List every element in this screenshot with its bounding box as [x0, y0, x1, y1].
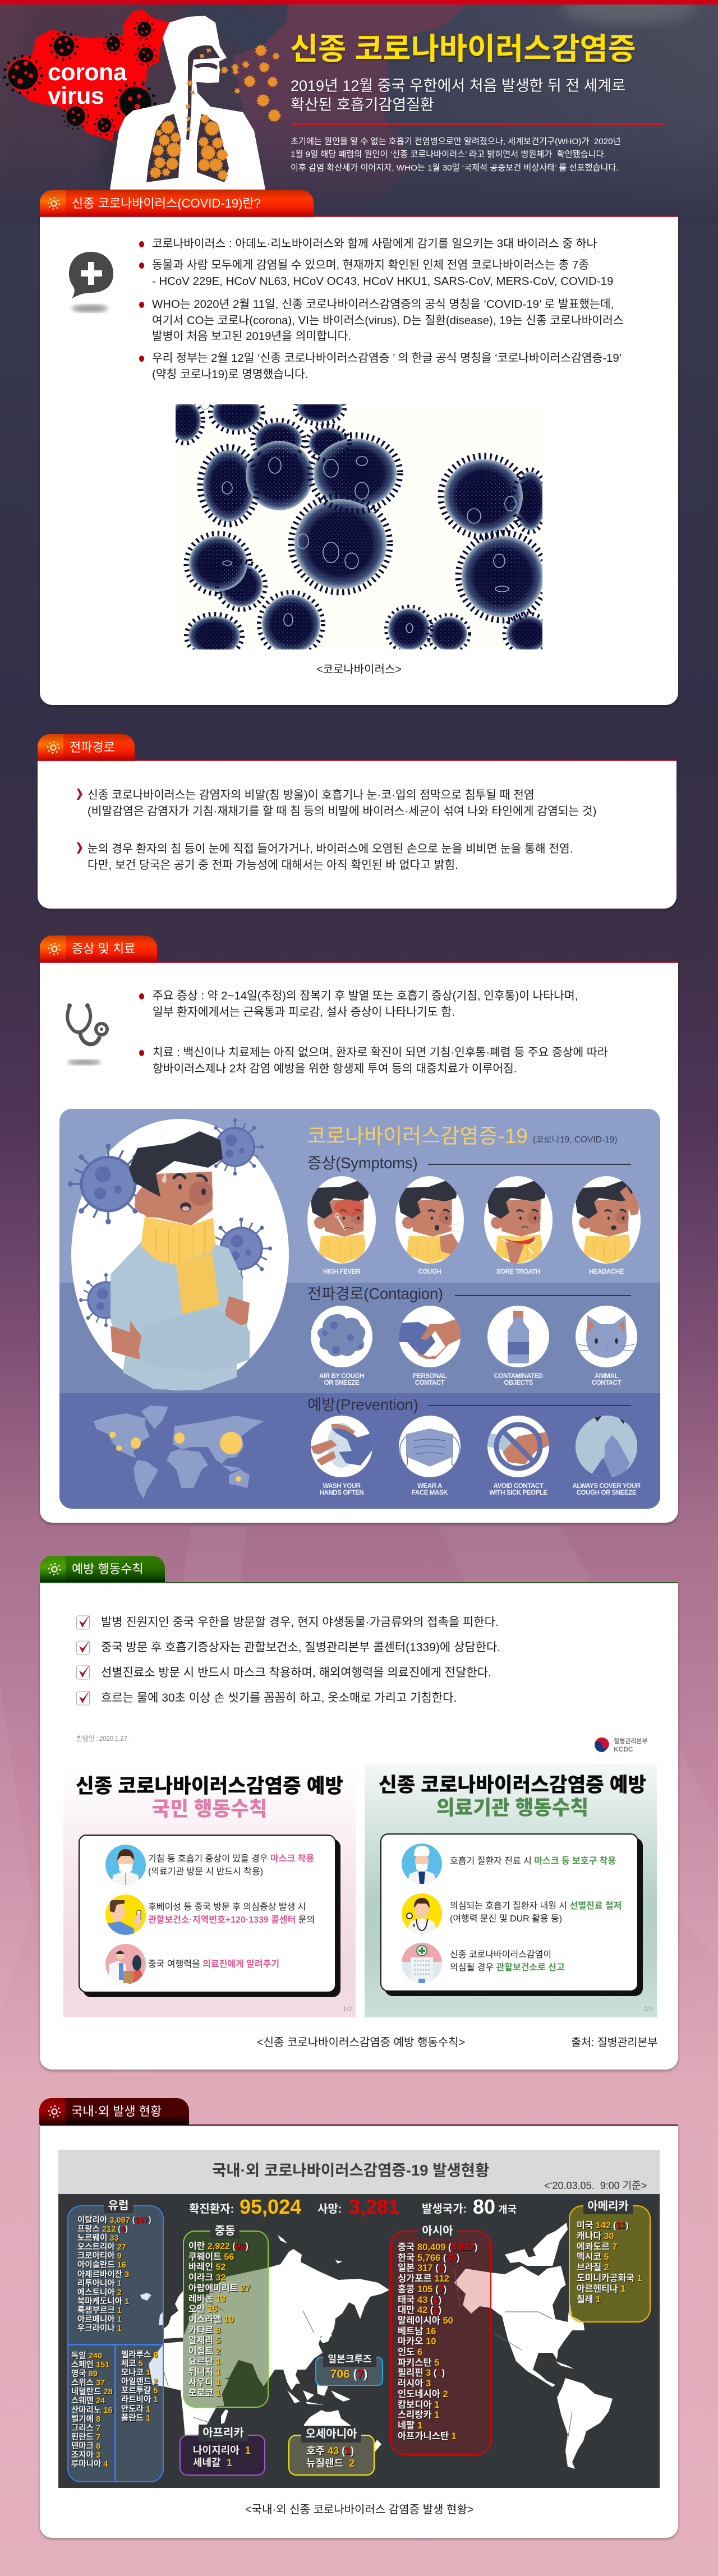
tab heading: 신종 코로나바이러스(COVID-19)란?: 신종 코로나바이러스(COVID-19)란? [72, 196, 261, 210]
poster subtitle: 국민 행동수칙 [152, 1793, 267, 1822]
subtitle: 2019년 12월 중국 우한에서 처음 발생한 뒤 전 세계로 [291, 77, 625, 94]
checklist: 흐르는 물에 30초 이상 손 씻기를 꼼꼼히 하고, 옷소매로 가리고 기침한다. [101, 1692, 457, 1704]
labels: contagion: CONTACT [415, 1380, 444, 1386]
text: row 1 [148, 1852, 314, 1878]
labels: prevention: FACE MASK [412, 1490, 448, 1496]
world map [58, 2194, 660, 2488]
bullet list: coronavirus facts: 발병이 처음 보고된 2019년을 의미합니다. [152, 330, 351, 343]
region label [323, 2352, 376, 2367]
text block: transmission notes: 다만, 보건 당국은 공기 중 전파 가능성에 대해서는 아직 확인된 바 없다고 밝힘. [88, 859, 458, 872]
country list: 카타르 8 [188, 2326, 221, 2335]
heading: contagion: 전파경로(Contagion) [307, 1285, 443, 1302]
country list: upper: 북마케도니아 1 [77, 2297, 129, 2306]
tab heading: 증상 및 치료: 증상 및 치료 [72, 942, 135, 956]
country list: 멕시코 5 [577, 2252, 609, 2262]
region label: 유럽 [108, 2200, 128, 2212]
country list: 요르단 1 [188, 2357, 221, 2367]
labels: contagion: CONTAMINATED [494, 1373, 542, 1380]
country list: 이란 2,922 (92) [188, 2242, 248, 2251]
issue date: 발행일 : 2020.1.27. [76, 1735, 128, 1743]
checklist: 중국 방문 후 호흡기증상자는 관할보건소, 질병관리본부 콜센터(1339)에 상담한다. [101, 1641, 500, 1654]
country list: 사우디 1 [188, 2378, 221, 2388]
country list: 인도네시아 2 [398, 2389, 448, 2399]
intro text [291, 137, 621, 173]
text: row 2 [148, 1901, 315, 1927]
country list: 알제리 5 [188, 2336, 221, 2345]
tab heading: 전파경로 [38, 734, 135, 761]
icon: speech bubble with plus [69, 252, 113, 313]
country list: 뉴질랜드 2 [306, 2458, 355, 2469]
world map with outbreak dots [94, 1405, 264, 1499]
icon: high fever [307, 1176, 376, 1264]
region label: 일본크루즈 [328, 2354, 372, 2365]
region label: 아메리카 [587, 2200, 629, 2213]
icon: stethoscope [66, 1003, 109, 1066]
country list: 중국 80,409 (3,012) [398, 2242, 477, 2252]
country list: 에콰도르 7 [577, 2242, 617, 2252]
heading: symptoms: 증상(Symptoms) [307, 1154, 417, 1172]
lungs silhouette figure with orange virus particles [110, 16, 280, 190]
country list: 파키스탄 5 [398, 2358, 440, 2368]
panel: COVID-19 infographic illustration [59, 1109, 660, 1509]
country list [398, 2242, 477, 2441]
text: row 2 [450, 1900, 622, 1925]
country list: 바레인 52 [188, 2262, 225, 2272]
intro text: 1월 9일 해당 폐렴의 원인이 ‘신종 코로나바이러스’ 라고 밝히면서 병원체가 확인됐습니다. [291, 150, 606, 159]
tab heading: 신종 코로나바이러스(COVID-19)란? [40, 190, 314, 216]
tab heading: 예방 행동수칙 [40, 1556, 165, 1582]
bullet list: coronavirus facts: - HCoV 229E, HCoV NL63, HCoV OC43, HCoV HKU1, SARS-CoV, MERS-CoV, COVID-19 [152, 275, 613, 287]
country list: upper: 아제르바이잔 3 [77, 2270, 129, 2279]
bullet list: coronavirus facts [139, 238, 624, 380]
country list: upper: 이탈리아 3,087 (107) [77, 2216, 151, 2225]
poster title: 신종 코로나바이러스감염증 예방 [76, 1770, 343, 1799]
box: Oceania [288, 2435, 375, 2476]
labels: contagion: CONTACT [592, 1380, 621, 1386]
wordmark: corona virus: corona [48, 59, 126, 86]
title: 신종 코로나바이러스감염증 [290, 32, 636, 66]
labels: prevention [320, 1483, 641, 1496]
panel: symptoms and treatment [40, 962, 678, 1523]
text: row 2: 관할보건소·지역번호+120·1339 콜센터 문의 [148, 1915, 315, 1925]
country list: 세네갈 1 [193, 2457, 232, 2468]
country list: 캐나다 30 [577, 2232, 614, 2241]
country list: 러시아 3 [398, 2379, 431, 2389]
text block: symptoms and treatment: 일부 환자에게서는 근육통과 피로감, 설사 증상이 나타나기도 함. [153, 1006, 455, 1019]
band: prevention background [59, 1393, 660, 1509]
country list: lower right [121, 2351, 158, 2423]
box: Europe [67, 2205, 164, 2482]
country list: lower right: 모나코 1 [121, 2368, 150, 2377]
country list: 튀니지 1 [188, 2367, 221, 2377]
country list: 인도 6 [398, 2347, 422, 2357]
country list: lower right: 체코 5 [121, 2360, 143, 2368]
text: row 3 [450, 1948, 565, 1974]
country list: upper: 프랑스 212 (4) [77, 2225, 128, 2234]
text: row 2: 후베이성 등 중국 방문 후 의심증상 발생 시 [148, 1902, 306, 1912]
country list: 캄보디아 1 [398, 2400, 440, 2410]
subheading: 코로나19, COVID-19: (코로나19, COVID-19) [533, 1135, 617, 1145]
country list: upper: 아이슬란드 16 [77, 2261, 126, 2270]
text block: symptoms and treatment [139, 989, 607, 1075]
country list: lower left: 핀란드 7 [71, 2433, 100, 2442]
country list: 아프가니스탄 1 [398, 2431, 457, 2441]
labels: prevention: AVOID CONTACT [494, 1483, 543, 1490]
icon: headache [572, 1176, 641, 1264]
icon: sore throat [484, 1176, 553, 1264]
box: Africa [180, 2435, 265, 2476]
country list: 일본 317 (6) [398, 2263, 447, 2273]
subtitle: 확산된 호흡기감염질환 [291, 96, 434, 113]
heading: prevention: 예방(Prevention) [307, 1396, 418, 1413]
poster text box [79, 1835, 336, 1993]
country list: 한국 5,766 (35) [398, 2253, 459, 2263]
logo: KCDC: KCDC [614, 1745, 633, 1753]
text block: transmission notes: 눈의 경우 환자의 침 등이 눈에 직접 들어가거나, 바이러스에 오염된 손으로 눈을 비비면 눈을 통해 전염. [88, 843, 573, 855]
icon: cough [395, 1176, 464, 1264]
poster: medical institution code of conduct [365, 1764, 657, 2017]
intro text: 이후 감염 확산세가 이어지자, WHO는 1월 30일 ‘국제적 공중보건 비상사태’ 를 선포했습니다. [291, 163, 619, 173]
logo: KCDC [592, 1735, 653, 1754]
country list: upper: 노르웨이 33 [77, 2234, 119, 2243]
bullet list: coronavirus facts: 동물과 사람 모두에게 감염될 수 있으며, 현재까지 확인된 인체 전염 코로나바이러스는 총 7종 [152, 259, 589, 271]
labels: contagion: OR SNEEZE [324, 1380, 359, 1386]
country list: lower left: 독일 240 [71, 2352, 102, 2361]
header banner with background [0, 0, 718, 191]
labels: prevention: WEAR A [417, 1483, 442, 1490]
country list: lower left: 조지아 3 [71, 2451, 100, 2460]
text block: transmission notes: (비말감염은 감염자가 기침·재채기를 할 때 침 등의 비말에 바이러스·세균이 섞여 나와 타인에게 감염되는 것) [88, 805, 596, 818]
box: Asia [390, 2231, 491, 2455]
country list [306, 2445, 355, 2469]
country list: 쿠웨이트 56 [188, 2252, 234, 2262]
country list: 네팔 1 [398, 2421, 422, 2431]
poster title: 신종 코로나바이러스감염증 예방 [379, 1769, 646, 1798]
region label [199, 2425, 248, 2441]
panel: domestic and overseas status [40, 2125, 678, 2538]
country list: 태국 43 (1) [398, 2295, 441, 2305]
text: row 3: 의심될 경우 관할보건소로 신고 [450, 1963, 565, 1973]
icon: wash hands [311, 1416, 372, 1477]
divider [67, 2344, 164, 2345]
country list: lower left: 산마리노 16 [71, 2406, 113, 2415]
caption: guidelines: <신종 코로나바이러스감염증 예방 행동수칙> [257, 2036, 465, 2049]
country list: 브라질 2 [577, 2263, 609, 2273]
icon: mask person [105, 1845, 146, 1885]
box: Japan cruise [315, 2357, 383, 2386]
labels: contagion: OBJECTS [504, 1380, 533, 1386]
country list: upper: 에스토니아 2 [77, 2288, 122, 2297]
total stats row [185, 2196, 522, 2220]
text block: symptoms and treatment: 항바이러스제나 2차 감염 예방을 위한 항생제 투여 등의 대증치료가 이루어짐. [153, 1062, 517, 1075]
country list: 마카오 10 [398, 2337, 436, 2347]
text: row 2: 의심되는 호흡기 질환자 내원 시 선별진료 철저 [450, 1901, 622, 1911]
subtitle [291, 77, 625, 113]
country list: 홍콩 105 (2) [398, 2284, 447, 2294]
band: contagion background [59, 1283, 660, 1393]
country list [577, 2221, 642, 2305]
background facets for lower sections [0, 1526, 718, 2086]
countries count: 발생국가: [422, 2203, 467, 2215]
source: 출처: 질병관리본부 [571, 2036, 657, 2049]
text: row 3: 신종 코로나바이러스감염이 [450, 1950, 551, 1960]
text: row 1: 호흡기 질환자 진료 시 마스크 등 보호구 착용 [450, 1856, 616, 1866]
total stats row: 80 [473, 2195, 495, 2218]
icon: avoid contact with sick people [487, 1416, 549, 1477]
country list: lower left: 덴마크 8 [71, 2442, 100, 2451]
region label: 아프리카 [202, 2427, 244, 2439]
labels: prevention: WASH YOUR [323, 1483, 361, 1490]
country list: 나이지리아 1 [193, 2445, 251, 2456]
icon: doctor with stethoscope [402, 1893, 442, 1934]
country list: lower left: 스페인 151 [71, 2361, 109, 2370]
country list: upper: 오스트리아 27 [77, 2243, 126, 2252]
country list [193, 2444, 251, 2469]
country list: 스리랑카 1 [398, 2410, 440, 2420]
country list: 미국 142 (11) [577, 2221, 629, 2231]
text: row 1: (의료기관 방문 시 반드시 착용) [148, 1867, 263, 1877]
checklist: 선별진료소 방문 시 반드시 마스크 착용하며, 해외여행력을 의료진에게 전달한다. [101, 1666, 491, 1679]
icon: hospital building [402, 1943, 442, 1983]
labels: prevention: COUGH OR SNEEZE [577, 1490, 636, 1496]
country list: 칠레 1 [577, 2295, 601, 2305]
icon: personal contact [399, 1306, 461, 1367]
labels: symptoms: COUGH [418, 1269, 441, 1275]
text: row 3: 중국 여행력을 의료진에게 알려주기 [148, 1960, 279, 1969]
labels: contagion [319, 1373, 622, 1386]
text: row 1: 기침 등 호흡기 증상이 있을 경우 마스크 착용 [148, 1854, 314, 1864]
panel: what is novel coronavirus [40, 216, 678, 705]
tab heading: 증상 및 치료 [40, 936, 157, 962]
tab heading: 전파경로: 전파경로 [70, 740, 115, 754]
panel: transmission route [38, 760, 676, 909]
total stats row: 3,281 [349, 2195, 399, 2218]
total stats row: 개국 [498, 2204, 517, 2215]
labels: symptoms: HEADACHE [589, 1269, 624, 1275]
region label [418, 2224, 457, 2238]
panel: prevention guidelines [40, 1582, 678, 2070]
panel header: status title bar [58, 2150, 660, 2194]
wordmark: corona virus: virus [48, 82, 104, 109]
country list: 레바논 13 [188, 2294, 225, 2304]
country list: lower right: 안도라 1 [121, 2405, 150, 2414]
country list: 이스라엘 10 [188, 2315, 234, 2325]
country list: lower left: 스웨덴 24 [71, 2397, 105, 2406]
box: Middle East [183, 2231, 269, 2408]
labels: prevention: HANDS OFTEN [320, 1490, 363, 1496]
bullet list: coronavirus facts: (약칭 코로나19)로 명명했습니다. [152, 368, 308, 380]
tab heading: 국내·외 발생 현황: 국내·외 발생 현황 [71, 2104, 162, 2118]
tab heading: 예방 행동수칙: 예방 행동수칙 [72, 1562, 144, 1576]
bullet list: coronavirus facts: 우리 정부는 2월 12일 ‘신종 코로나바이러스감염증 ’ 의 한글 공식 명칭을 ‘코로나바이러스감염증-19’ [152, 352, 622, 365]
country list: 모로코 1 [188, 2389, 221, 2398]
checklist: 발병 진원지인 중국 우한을 방문할 경우, 현지 야생동물·가금류와의 접촉을 피한다. [101, 1616, 499, 1629]
country list: 도미니카공화국 1 [577, 2274, 642, 2283]
illustration: sick man with viruses [68, 1118, 289, 1390]
region label: 중동 [215, 2225, 235, 2237]
heading: 코로나바이러스감염증-19: 코로나바이러스감염증-19 [307, 1125, 528, 1148]
country list: 아르헨티나 1 [577, 2284, 625, 2294]
region label [210, 2224, 240, 2238]
wordmark: corona virus [48, 59, 127, 109]
country list: 아랍에미리트 27 [188, 2284, 251, 2293]
labels: symptoms: HIGH FEVER [323, 1269, 360, 1275]
icon: clinic consultation [105, 1944, 146, 1984]
image caption: <코로나바이러스> [316, 663, 402, 676]
country list: upper [77, 2216, 151, 2333]
bullet list: coronavirus facts: 여기서 CO는 코로나(corona), VI는 바이러스(virus), D는 질환(disease), 19는 신종 코로나바이러스 [152, 314, 624, 326]
text block: transmission notes [77, 789, 596, 872]
box: Americas [569, 2205, 651, 2322]
country list: upper: 아르메니아 1 [77, 2315, 122, 2324]
labels: contagion: PERSONAL [413, 1373, 447, 1380]
page number: 2/2 [643, 2005, 653, 2013]
text block: transmission notes: 신종 코로나바이러스는 감염자의 비말(침 방울)이 호흡기나 눈·코·입의 점막으로 침투될 때 전염 [88, 789, 535, 801]
text: row 2: (여행력 문진 및 DUR 활용 등) [450, 1914, 562, 1924]
country list: 베트남 16 [398, 2326, 436, 2337]
country list: lower left: 그리스 7 [71, 2424, 100, 2433]
icon: air by cough or sneeze [311, 1306, 372, 1367]
country list: upper: 우크라이나 1 [77, 2324, 122, 2333]
red divider [291, 123, 663, 125]
icon: nurse with mask [402, 1844, 442, 1884]
bullet list: coronavirus facts: 코로나바이러스 : 아데노·리노바이러스와 함께 사람에게 감기를 일으키는 3대 바이러스 중 하나 [152, 238, 597, 250]
country list: 말레이시아 50 [398, 2316, 453, 2326]
country list: lower right: 벨라루스 6 [121, 2351, 158, 2360]
image: coronavirus particles [176, 404, 542, 649]
labels: prevention: ALWAYS COVER YOUR [572, 1483, 641, 1490]
icon: contaminated objects [487, 1306, 549, 1367]
country list: lower left: 영국 89 [71, 2370, 98, 2379]
region label: 아시아 [422, 2225, 453, 2237]
country list: 싱가포르 112 [398, 2274, 449, 2284]
country list: lower right: 라트비아 1 [121, 2395, 158, 2404]
icon: cover cough or sneeze [576, 1416, 637, 1477]
labels: symptoms [323, 1269, 624, 1275]
labels: contagion: AIR BY COUGH [319, 1373, 364, 1380]
icon: phone call 1339 [105, 1895, 146, 1935]
country list: upper: 크로아티아 9 [77, 2252, 122, 2261]
poster subtitle: 의료기관 행동수칙 [436, 1792, 588, 1821]
labels: contagion: ANIMAL [595, 1373, 618, 1380]
icon: wear a face mask [399, 1416, 461, 1477]
labels: symptoms: SORE TROATH [496, 1269, 540, 1275]
country list: lower left: 스위스 37 [71, 2379, 105, 2388]
country list: lower right: 폴란드 1 [121, 2414, 150, 2423]
cruise count: 706 (7) [330, 2368, 367, 2381]
map of China with virus particles [3, 10, 169, 145]
country list: lower left: 벨기에 8 [71, 2415, 100, 2424]
region label [301, 2426, 361, 2443]
country list: 이집트 2 [188, 2347, 221, 2356]
status chart title: 국내·외 코로나바이러스감염증-19 발생현황 [212, 2162, 489, 2179]
deaths count: 사망: [317, 2203, 342, 2215]
country list: 필리핀 3 (1) [398, 2368, 445, 2378]
total stats row: 95,024 [240, 2195, 301, 2218]
logo: KCDC: 질병관리본부 [614, 1737, 648, 1745]
country list: 호주 43 (1) [306, 2445, 354, 2457]
icon: animal contact [576, 1306, 637, 1367]
reference date: <‘20.03.05. 9:00 기준> [544, 2180, 647, 2191]
country list: lower left [71, 2352, 113, 2469]
checklist [73, 1610, 522, 1708]
tab heading: 국내·외 발생 현황 [39, 2098, 189, 2125]
poster text box [380, 1833, 638, 1992]
country list: upper: 룩셈부르크 1 [77, 2306, 122, 2315]
region label [104, 2199, 133, 2213]
poster: public code of conduct [63, 1767, 356, 2017]
country list: upper: 리투아니아 1 [77, 2279, 122, 2288]
page number: 1/2 [343, 2005, 352, 2013]
caption: status: <국내·외 신종 코로나바이러스 감염증 발생 현황> [245, 2504, 473, 2516]
intro text: 초기에는 원인을 알 수 없는 호흡기 전염병으로만 알려졌으나, 세계보건기구(WHO)가 2020년 [291, 137, 621, 146]
country list: lower right: 포르투갈 5 [121, 2386, 158, 2395]
country list: lower right: 아일랜드 2 [121, 2377, 158, 2386]
country list: lower left: 네덜란드 28 [71, 2388, 113, 2397]
country list: 오만 15 [188, 2305, 218, 2314]
text block: symptoms and treatment: 주요 증상 : 약 2~14일(추정)의 잠복기 후 발열 또는 호흡기 증상(기침, 인후통)이 나타나며, [153, 990, 578, 1002]
bullet list: coronavirus facts: WHO는 2020년 2월 11일, 신종 코로나바이러스감염증의 공식 명칭을 ‘COVID-19’ 로 발표했는데, [152, 298, 614, 311]
text block: symptoms and treatment: 치료 : 백신이나 치료제는 아직 없으며, 환자로 확진이 되면 기침·인후통·폐렴 등 주요 증상에 따라 [153, 1047, 607, 1059]
country list [188, 2242, 251, 2399]
country list: 이라크 32 [188, 2273, 225, 2283]
region label [583, 2199, 633, 2214]
confirmed count: 확진환자: [189, 2203, 234, 2215]
region label: 오세아니아 [305, 2428, 357, 2440]
country list: 대만 42 (1) [398, 2305, 441, 2315]
labels: prevention: WITH SICK PEOPLE [489, 1490, 547, 1496]
country list: lower left: 루마니아 4 [71, 2460, 108, 2469]
